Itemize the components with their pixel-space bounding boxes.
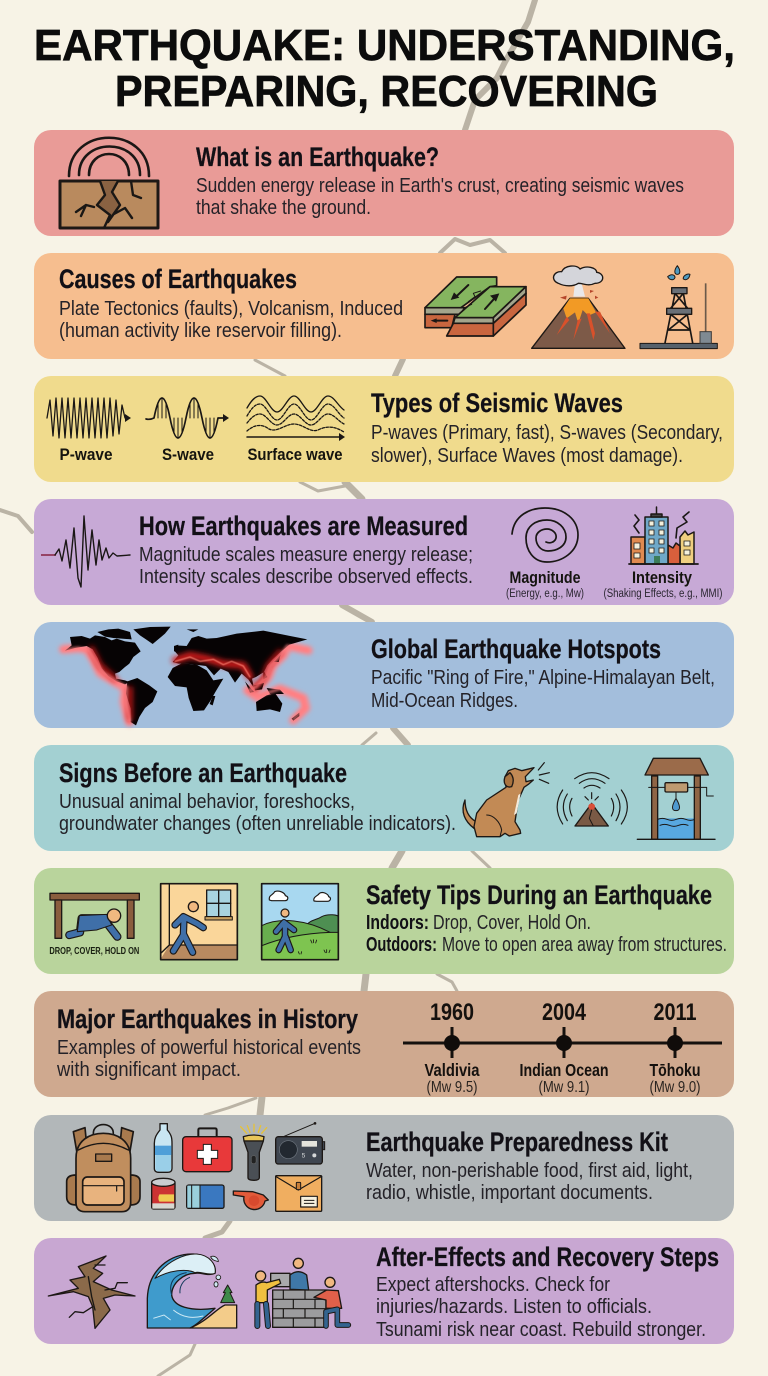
icon: seismogram <box>41 516 130 587</box>
description: Magnitude scales measure energy release; <box>139 543 473 566</box>
icon: radio: 5 <box>302 1153 306 1160</box>
indoors tip <box>366 911 591 934</box>
panel: types of seismic waves <box>34 376 734 482</box>
heading: What is an Earthquake? <box>196 142 439 172</box>
description <box>139 543 473 588</box>
description: Tsunami risk near coast. Rebuild stronger. <box>376 1318 706 1341</box>
description <box>376 1273 706 1341</box>
heading: Major Earthquakes in History <box>57 1004 358 1034</box>
icon: erupting volcano <box>532 266 625 348</box>
event: 2004 Indian Ocean: 2004 <box>542 999 586 1026</box>
icon: drop, cover, hold on <box>49 893 139 957</box>
event: 1960 Valdivia: (Mw 9.5) <box>426 1079 478 1096</box>
description: Unusual animal behavior, foreshocks, <box>59 790 355 813</box>
description: slower), Surface Waves (most damage). <box>371 444 683 467</box>
panel: signs before an earthquake <box>34 745 734 851</box>
description <box>196 174 684 219</box>
event: 1960 Valdivia: 1960 <box>430 999 474 1026</box>
icon: food can <box>152 1178 175 1209</box>
event: 1960 Valdivia: Valdivia <box>424 1060 480 1080</box>
icon: surface wave <box>247 396 345 464</box>
heading: Global Earthquake Hotspots <box>371 634 661 664</box>
icon: document envelope <box>276 1176 322 1211</box>
title <box>34 21 735 116</box>
description: Sudden energy release in Earth's crust, creating seismic waves <box>196 174 684 197</box>
outdoors tip: Outdoors: <box>366 933 437 956</box>
panel: causes of earthquakes <box>34 253 734 359</box>
icon: magnitude spiral: (Energy, e.g., Mw) <box>506 588 584 600</box>
timeline <box>403 999 722 1096</box>
icon: magnitude spiral: Magnitude <box>510 569 580 587</box>
icon: intensity damaged city: Intensity <box>632 569 693 587</box>
title: EARTHQUAKE: UNDERSTANDING, <box>34 21 735 70</box>
indoors tip: Drop, Cover, Hold On. <box>433 911 591 934</box>
event: 2004 Indian Ocean: (Mw 9.1) <box>538 1079 590 1096</box>
description: Water, non-perishable food, first aid, light, <box>366 1159 693 1182</box>
description: Examples of powerful historical events <box>57 1036 361 1059</box>
description: Pacific "Ring of Fire," Alpine-Himalayan Belt, <box>371 666 715 689</box>
description <box>371 421 723 467</box>
icon: flashlight <box>241 1124 267 1180</box>
icon: people rebuilding wall <box>256 1258 348 1327</box>
icon: intensity damaged city <box>604 507 723 600</box>
description: injuries/hazards. Listen to officials. <box>376 1295 652 1318</box>
description: Intensity scales describe observed effects. <box>139 565 473 588</box>
icon: tectonic fault block <box>425 277 526 336</box>
title: PREPARING, RECOVERING <box>115 67 658 116</box>
event: 2011 Tohoku: 2011 <box>654 999 696 1026</box>
icon: radio <box>276 1122 325 1164</box>
panel: global earthquake hotspots <box>34 622 734 728</box>
description: groundwater changes (often unreliable indicators). <box>59 812 456 835</box>
icon: P-wave: P-wave <box>60 446 112 464</box>
icon: person outdoors <box>262 884 338 960</box>
event: 2011 Tohoku: Tōhoku <box>650 1060 700 1080</box>
heading: Earthquake Preparedness Kit <box>366 1127 668 1157</box>
panel: safety tips <box>34 868 734 974</box>
description: with significant impact. <box>56 1058 241 1081</box>
icon: volcano with signal arcs <box>557 773 627 826</box>
icon: first aid kit <box>183 1128 232 1172</box>
icon: intensity damaged city: (Shaking Effects, e.g., MMI) <box>604 588 723 600</box>
icon: drop, cover, hold on: DROP, COVER, HOLD ON <box>49 946 139 957</box>
icons: drop cover, indoor, outdoor <box>49 884 338 960</box>
heading: Signs Before an Earthquake <box>59 758 347 788</box>
icon: surface wave: Surface wave <box>248 446 342 464</box>
description <box>56 1036 361 1081</box>
icon: P-wave <box>47 398 131 464</box>
description <box>366 1159 693 1204</box>
icon: barking dog <box>463 763 549 837</box>
icon: ground fissure <box>48 1256 135 1328</box>
icon: tsunami wave <box>147 1254 237 1328</box>
heading: How Earthquakes are Measured <box>139 511 468 541</box>
icon: S-wave: S-wave <box>162 446 214 464</box>
background crack lines <box>0 0 535 1376</box>
description: Expect aftershocks. Check for <box>376 1273 610 1296</box>
icon: whistle <box>233 1191 268 1210</box>
icon: backpack <box>67 1125 140 1212</box>
icon: person leaving room <box>161 884 237 960</box>
icon: blue food tin <box>187 1185 224 1208</box>
description: that shake the ground. <box>196 196 371 219</box>
icon: cracked ground with seismic arcs <box>60 138 158 228</box>
event: 2011 Tohoku: (Mw 9.0) <box>650 1079 700 1096</box>
panel: what is an earthquake <box>34 130 734 236</box>
description <box>59 297 403 342</box>
panel: major earthquakes in history <box>34 991 734 1097</box>
description: Mid-Ocean Ridges. <box>371 689 518 712</box>
after-effect icons <box>48 1254 348 1328</box>
panel: after-effects and recovery <box>34 1238 734 1344</box>
icon: water well <box>637 758 715 839</box>
heading: Causes of Earthquakes <box>59 264 297 294</box>
panel: earthquake preparedness kit <box>34 1115 734 1221</box>
event: 2004 Indian Ocean: Indian Ocean <box>520 1060 608 1080</box>
indoors tip: Indoors: <box>366 911 429 934</box>
icon: drilling rig <box>640 266 717 349</box>
icon: water bottle <box>154 1124 172 1172</box>
heading: Types of Seismic Waves <box>371 388 623 418</box>
panel: how earthquakes are measured <box>34 499 734 605</box>
event: 2004 Indian Ocean <box>520 999 608 1096</box>
description: (human activity like reservoir filling). <box>59 319 342 342</box>
icon: magnitude spiral <box>506 508 584 600</box>
world map with glowing seismic belts <box>63 627 308 725</box>
icons: dog, signal volcano, well <box>463 758 715 839</box>
event: 1960 Valdivia <box>424 999 480 1096</box>
event: 2011 Tohoku <box>650 999 700 1096</box>
icons: fault, volcano, drilling rig <box>425 266 717 349</box>
description: radio, whistle, important documents. <box>366 1181 653 1204</box>
kit icons <box>67 1122 325 1212</box>
description: Plate Tectonics (faults), Volcanism, Induced <box>59 297 403 320</box>
icon: S-wave <box>146 398 229 464</box>
description <box>59 790 456 835</box>
description <box>371 666 715 712</box>
